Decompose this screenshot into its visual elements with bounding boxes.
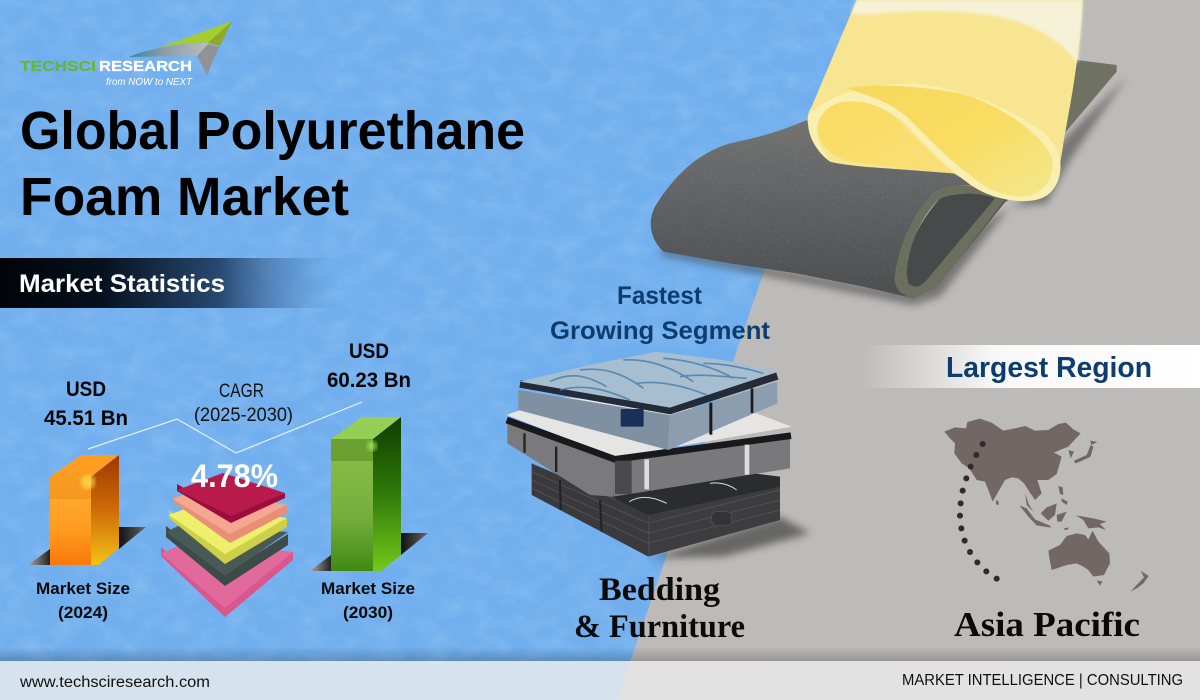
map landmass: Australia [1048, 531, 1110, 586]
caption: bedding and furniture: & Furniture [574, 609, 745, 645]
footer shadow [0, 647, 1200, 661]
foam rolls illustration [647, 0, 1127, 305]
bar: market size 2024 [28, 455, 146, 565]
background: grey diagonal panel [617, 0, 1200, 700]
caption: market size 2030 [321, 579, 415, 622]
caption: bedding and furniture [574, 572, 745, 645]
section band: largest region: Largest Region [946, 352, 1152, 384]
caption: market size 2024 [36, 579, 130, 622]
bottom mattress [532, 463, 780, 557]
sheet: pink [161, 540, 293, 617]
heading: fastest growing segment [550, 282, 771, 345]
yellow foam outer lip [808, 83, 1061, 201]
heading: fastest growing segment: Growing Segment [550, 317, 771, 345]
caption: Asia Pacific: Asia Pacific [954, 605, 1140, 644]
sheet: crimson [177, 473, 285, 523]
caption: market size 2024: (2024) [58, 603, 108, 622]
logo: TechSci Research [20, 21, 232, 88]
quilted pattern [550, 358, 763, 400]
top mattress [518, 352, 777, 450]
grey foam far sheet [973, 60, 1117, 202]
CAGR label: CAGR [219, 381, 264, 402]
bar: market size 2030 [310, 417, 428, 571]
map islands: New Guinea [1064, 515, 1107, 530]
caption: market size 2024: Market Size [36, 579, 130, 598]
footer tagline: MARKET INTELLIGENCE | CONSULTING [902, 672, 1183, 689]
section band: market statistics [0, 258, 338, 308]
value: USD 60.23 Bn: 60.23 Bn [327, 369, 411, 392]
footer website: www.techsciresearch.com [19, 674, 210, 691]
value: USD 45.51 Bn [44, 378, 128, 430]
map islands: New Zealand [1131, 571, 1149, 591]
grey foam near surface [651, 120, 977, 298]
title: Foam Market [20, 167, 349, 227]
grey foam speckle [647, 120, 980, 300]
foam sheet stack [161, 473, 293, 617]
sheet: dark green [166, 526, 288, 586]
yellow foam inner fold upper [847, 86, 1052, 197]
map islands: Southeast Asia [996, 486, 1068, 528]
caption: market size 2030: Market Size [321, 579, 415, 598]
foam tube rim [895, 185, 1005, 299]
logo arrow mark [129, 21, 232, 75]
section band: market statistics: Market Statistics [19, 270, 225, 298]
value: USD 45.51 Bn: 45.51 Bn [44, 407, 128, 430]
map dotted route [957, 441, 1000, 582]
middle mattress [507, 397, 792, 497]
logo tagline: from NOW to NEXT [106, 77, 193, 88]
sheet: salmon [173, 488, 287, 543]
map islands: Japan and Korea [1068, 441, 1097, 463]
foam shadow [660, 77, 1127, 305]
map: Asia Pacific [944, 419, 1149, 591]
logo: TechSci Research: RESEARCH [99, 58, 192, 75]
value: USD 45.51 Bn: USD [66, 378, 106, 401]
mattress stack illustration [507, 352, 810, 558]
value: USD 60.23 Bn [327, 340, 411, 392]
value: USD 60.23 Bn: USD [349, 340, 389, 363]
heading: fastest growing segment: Fastest [617, 282, 703, 310]
sheet: yellow [169, 505, 287, 564]
mattress shadow [650, 517, 810, 558]
yellow foam body [808, 0, 1083, 201]
value: CAGR 4.78%: 4.78% [191, 458, 278, 494]
section band: largest region [860, 345, 1200, 388]
caption: bedding and furniture: Bedding [599, 572, 721, 608]
foam tube interior [906, 194, 1007, 297]
CAGR label [194, 381, 293, 426]
title [20, 101, 525, 227]
map landmass: mainland Asia [944, 419, 1081, 502]
yellow foam inner fold lower [817, 101, 955, 173]
caption: market size 2030: (2030) [343, 603, 393, 622]
title: Global Polyurethane [20, 101, 525, 161]
logo wordmark: TECHSCI [20, 58, 96, 75]
trend line [88, 402, 362, 453]
yellow foam cream top band [852, 0, 1083, 63]
CAGR label: (2025-2030) [194, 405, 293, 426]
footer bar [0, 661, 1200, 700]
